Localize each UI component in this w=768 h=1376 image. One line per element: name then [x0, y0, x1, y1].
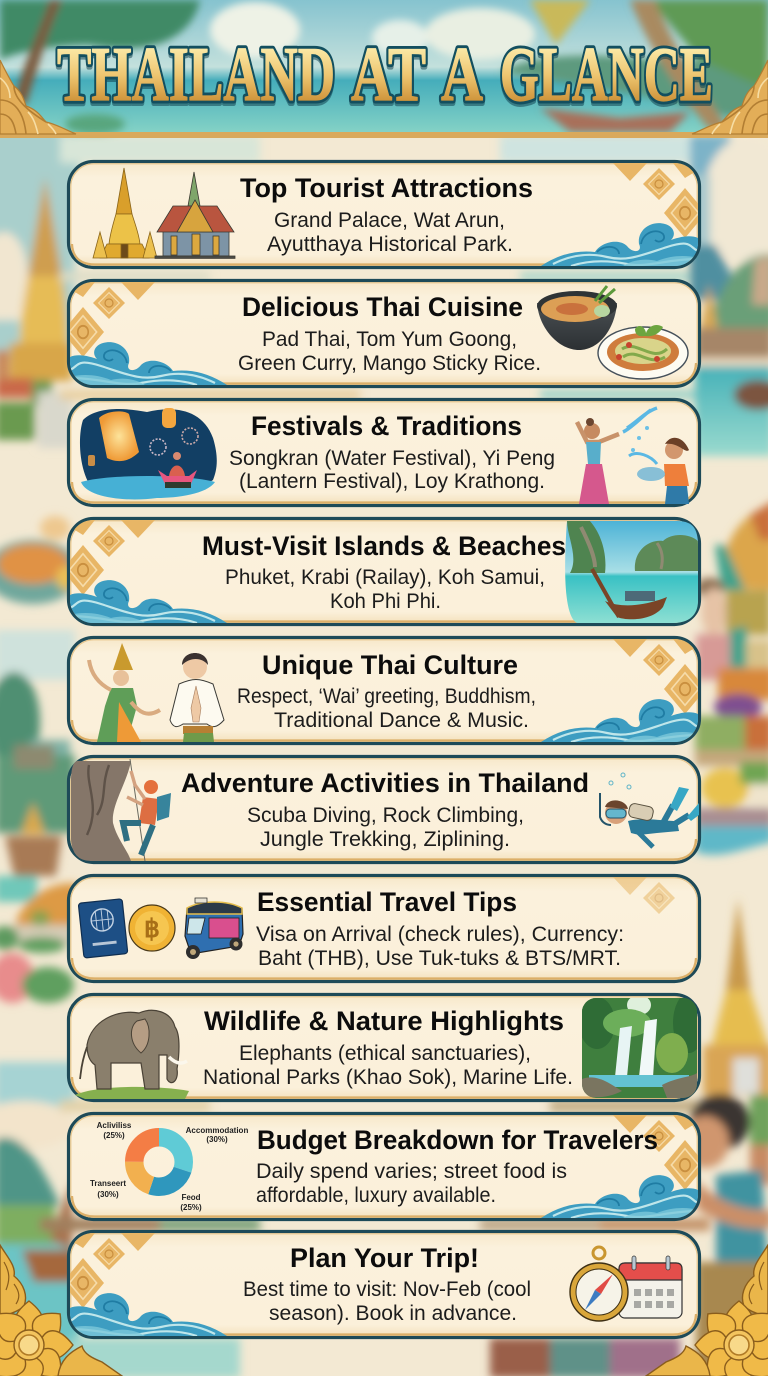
donut chart — [134, 1137, 184, 1187]
panel: essential travel tips — [68, 876, 700, 982]
chart label: accommodation: (30%) — [206, 1135, 228, 1144]
text block: Koh Phi Phi. — [330, 590, 441, 613]
chart label: transport: Transeert — [90, 1179, 126, 1188]
title: A — [441, 31, 483, 117]
chart label: transport — [90, 1179, 126, 1199]
icon: limestone islands and longtail boat — [562, 520, 702, 624]
corner ornament: bottom left — [0, 1245, 122, 1376]
icon: passport — [78, 899, 128, 958]
text block — [247, 804, 524, 851]
panel: plan your trip — [62, 1232, 700, 1338]
text block: Daily spend varies; street food is — [256, 1160, 567, 1183]
heading: Must-Visit Islands & Beaches — [202, 531, 566, 561]
title: THAILAND — [57, 31, 335, 117]
corner ornament: top right — [692, 60, 768, 134]
chart label: activities: Acliviliss — [97, 1121, 132, 1130]
icon: elephant — [75, 1010, 189, 1099]
corner ornament: top left — [0, 60, 76, 134]
text block: Phuket, Krabi (Railay), Koh Samui, — [225, 566, 545, 589]
icon: jungle waterfall — [582, 998, 697, 1098]
panel: islands and beaches — [62, 518, 702, 624]
text block: Jungle Trekking, Ziplining. — [260, 828, 510, 851]
decoration: thai pattern and waves — [62, 1233, 227, 1336]
heading: Unique Thai Culture — [262, 650, 518, 680]
chart label: activities — [97, 1121, 132, 1140]
panel: festivals and traditions — [68, 400, 700, 506]
left strip — [0, 130, 80, 255]
text block — [229, 447, 555, 493]
heading: Plan Your Trip! — [290, 1243, 479, 1273]
title: AT — [351, 31, 426, 117]
chart label: transport: (30%) — [97, 1190, 119, 1199]
right strip — [690, 135, 730, 180]
title: A — [441, 31, 483, 117]
text block: Pad Thai, Tom Yum Goong, — [262, 328, 517, 351]
chart label: food: Feod — [181, 1193, 201, 1202]
text block — [267, 209, 513, 256]
text block — [243, 1278, 531, 1325]
decoration: thai pattern and waves — [541, 1115, 706, 1218]
title — [57, 31, 713, 120]
panel: delicious thai cuisine — [62, 280, 700, 386]
chart label: accommodation: Accommodation — [186, 1126, 248, 1135]
heading: Adventure Activities in Thailand — [181, 768, 589, 798]
icon: thai dancer — [89, 643, 160, 742]
text block — [203, 1042, 573, 1089]
icon: songkran water fight — [577, 408, 689, 504]
text block: affordable, luxury available. — [256, 1184, 496, 1207]
icon: rock climber — [71, 759, 171, 861]
icon: golden stupa — [93, 168, 157, 258]
heading: Essential Travel Tips — [257, 887, 517, 917]
chart label: accommodation — [186, 1126, 248, 1144]
icon: compass — [570, 1247, 628, 1321]
icon: tuk-tuk — [185, 898, 243, 959]
heading: Top Tourist Attractions — [240, 173, 533, 203]
title: A — [441, 34, 483, 120]
decoration: thai pattern and waves — [62, 520, 227, 623]
icon: papaya salad plate — [598, 325, 688, 379]
icon: lantern night scene — [80, 408, 217, 499]
heading: Wildlife & Nature Highlights — [204, 1006, 564, 1036]
icon: man doing wai — [170, 653, 224, 742]
text block: Scuba Diving, Rock Climbing, — [247, 804, 524, 827]
title: THAILAND — [57, 31, 335, 117]
panel: adventure activities — [68, 756, 700, 862]
title: THAILAND — [57, 34, 335, 120]
text block: Traditional Dance & Music. — [274, 709, 529, 732]
chart label: food: (25%) — [180, 1203, 202, 1212]
text block — [256, 1160, 567, 1207]
panel: unique thai culture — [68, 638, 706, 744]
text block — [238, 328, 541, 375]
text block: Respect, ‘Wai’ greeting, Buddhism, — [237, 685, 536, 708]
text block — [225, 566, 545, 613]
panel: wildlife and nature — [68, 993, 705, 1100]
text block: Ayutthaya Historical Park. — [267, 233, 513, 256]
icon: baht coin — [129, 905, 175, 951]
heading: Budget Breakdown for Travelers — [257, 1125, 658, 1155]
text block: season). Book in advance. — [269, 1302, 517, 1325]
text block: Elephants (ethical sanctuaries), — [239, 1042, 531, 1065]
heading: Delicious Thai Cuisine — [242, 292, 523, 322]
decoration: thai pattern and waves — [62, 282, 227, 385]
corner ornament: bottom right — [646, 1245, 768, 1376]
text block: Grand Palace, Wat Arun, — [274, 209, 505, 232]
text block: Baht (THB), Use Tuk-tuks & BTS/MRT. — [258, 947, 621, 970]
icon: baht coin: ฿ — [144, 915, 160, 943]
text block: Songkran (Water Festival), Yi Peng — [229, 447, 555, 470]
text block: Best time to visit: Nov-Feb (cool — [243, 1278, 531, 1301]
text block — [237, 685, 536, 732]
title: AT — [351, 31, 426, 117]
icon: pad thai bowl — [537, 286, 617, 350]
panel: budget breakdown — [68, 1114, 706, 1220]
title: AT — [351, 34, 426, 120]
text block: (Lantern Festival), Loy Krathong. — [239, 470, 545, 493]
heading: Festivals & Traditions — [251, 411, 522, 441]
decoration: thai pattern and waves — [541, 639, 706, 742]
text block: National Parks (Khao Sok), Marine Life. — [203, 1066, 573, 1089]
header scene — [0, 0, 768, 138]
icon: scuba diver — [600, 773, 699, 847]
chart label: food — [180, 1193, 202, 1212]
row gaps — [60, 135, 260, 163]
decoration: thai pattern and waves — [541, 163, 706, 266]
panel: top tourist attractions — [68, 162, 706, 268]
icon: thai temple — [155, 172, 235, 258]
text block: Green Curry, Mango Sticky Rice. — [238, 352, 541, 375]
text block: Visa on Arrival (check rules), Currency: — [256, 923, 624, 946]
icon: calendar — [619, 1256, 682, 1318]
text block — [256, 923, 624, 970]
decoration: thai pattern — [613, 877, 675, 914]
bottom row — [70, 1338, 240, 1376]
chart label: activities: (25%) — [103, 1131, 125, 1140]
